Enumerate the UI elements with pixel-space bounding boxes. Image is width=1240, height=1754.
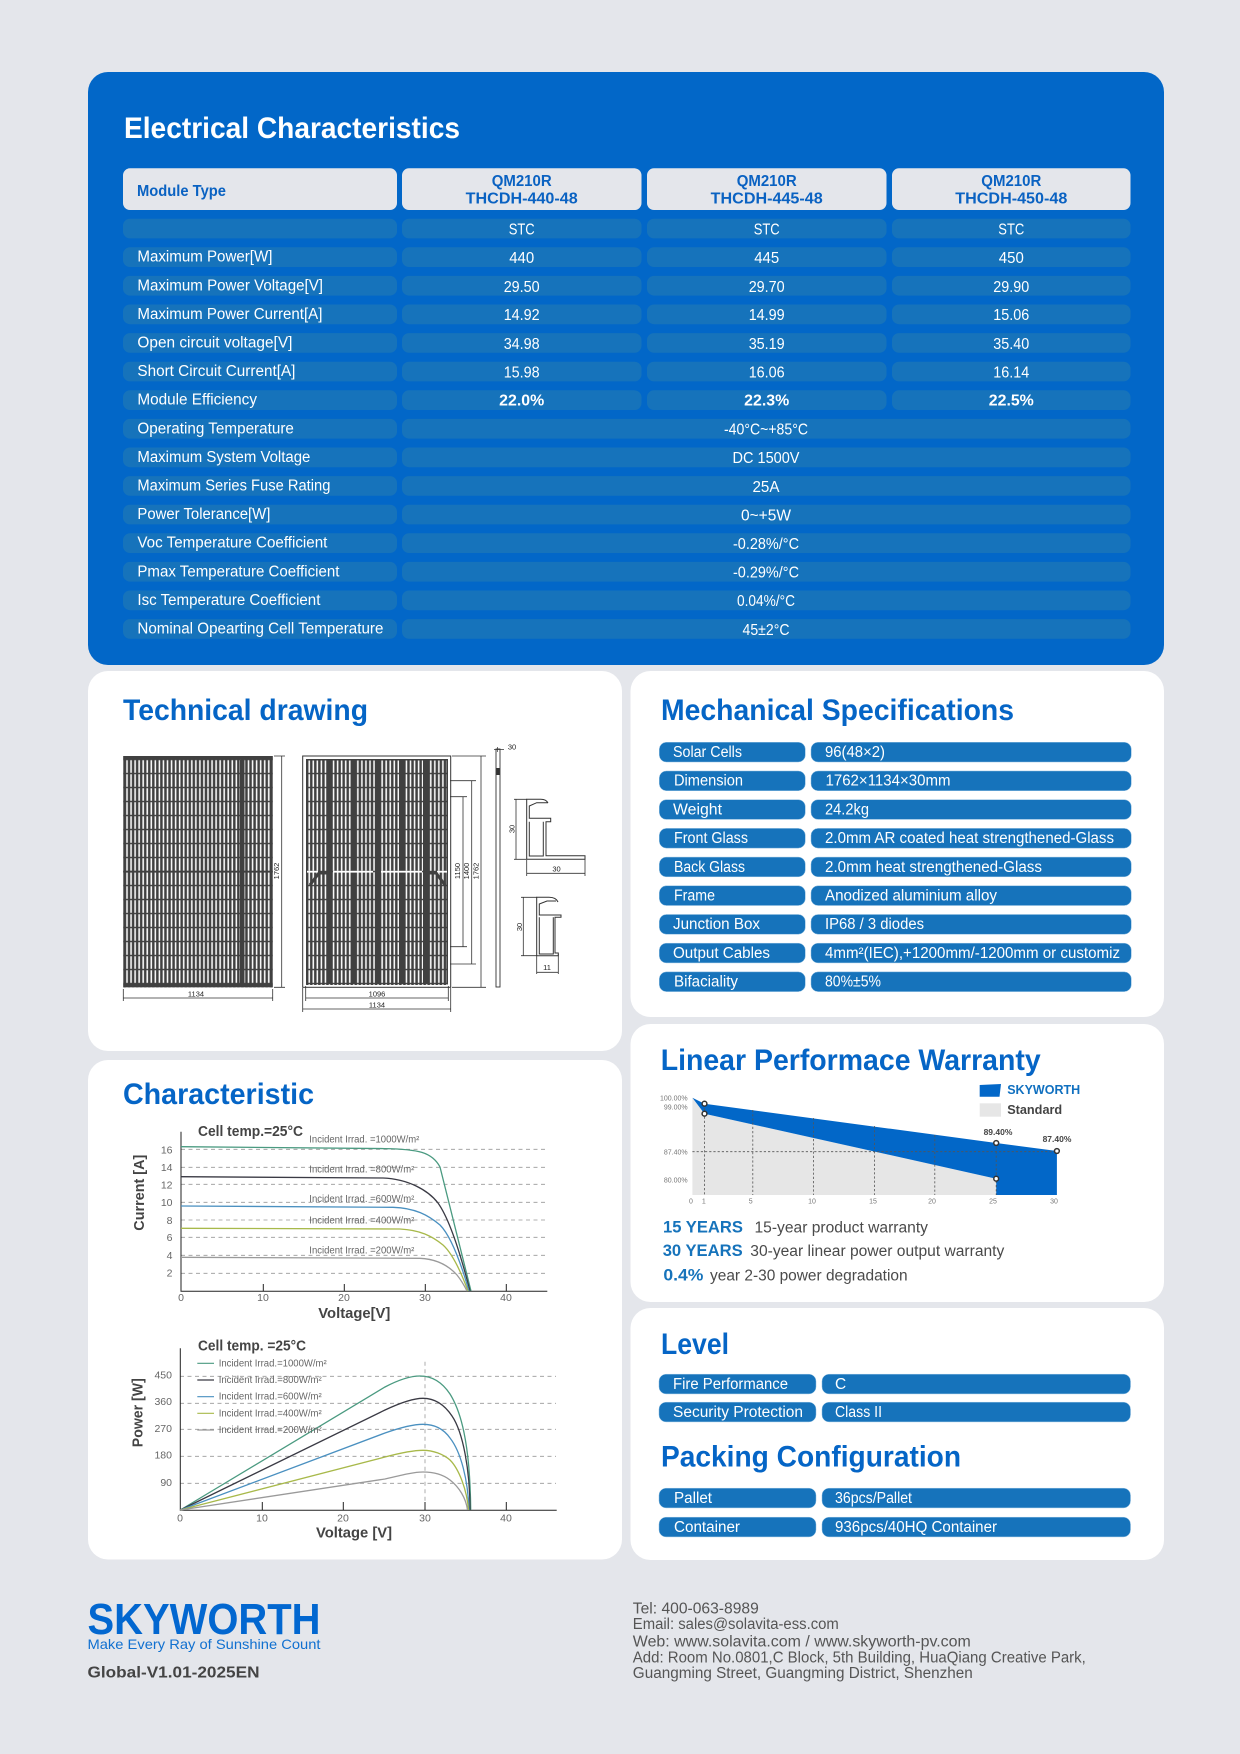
panel: technical drawing (88, 671, 622, 1051)
chart: current vs voltage: 40 (500, 1292, 512, 1304)
heading: packing configuration: Packing Configuration (661, 1440, 961, 1474)
table row labels: Maximum Power Current[A] (137, 306, 322, 323)
spec labels and values: Frame (674, 888, 715, 904)
chart: current vs voltage: 4 (167, 1250, 173, 1262)
chart: warranty curve: 15 (869, 1198, 877, 1205)
drawing: module rear view (303, 756, 486, 1012)
chart: power vs voltage: 90 (160, 1477, 172, 1489)
spec labels and values: 2.0mm AR coated heat strengthened-Glass (825, 830, 1114, 847)
table values: 450 (999, 250, 1024, 267)
chart: warranty curve: 1 (702, 1198, 706, 1205)
chart: warranty curve: 99.00% (664, 1104, 688, 1112)
table header row: Module Type (137, 183, 226, 200)
chart legend: skyworth and standard: SKYWORTH (1007, 1082, 1080, 1097)
chart: warranty curve: 87.40% (1043, 1134, 1072, 1144)
chart legend (197, 1358, 327, 1436)
table values: STC (998, 222, 1024, 238)
chart legend: skyworth and standard (980, 1082, 1080, 1117)
chart: power vs voltage (130, 1339, 557, 1542)
level rows: Class II (835, 1404, 882, 1421)
table values: 29.70 (749, 279, 785, 296)
table values: 29.50 (504, 279, 540, 296)
chart: current vs voltage (131, 1124, 547, 1322)
table values: STC (754, 222, 780, 238)
footer: contact details (633, 1600, 1086, 1682)
table values: 29.90 (993, 279, 1030, 296)
drawing: frame profile short side: 30 (515, 923, 524, 931)
panel: mechanical specifications (630, 671, 1164, 1017)
table values: 15.98 (504, 364, 540, 381)
drawing: frame profile long side: 30 (552, 864, 561, 874)
table header row: THCDH-445-48 (711, 190, 823, 207)
packing rows: Container (674, 1519, 740, 1536)
chart legend: Incident Irrad.=400W/m² (219, 1408, 322, 1419)
chart: current vs voltage: 10 (161, 1197, 173, 1209)
chart: power vs voltage: 30 (419, 1513, 431, 1525)
table header row: QM210R (981, 173, 1042, 190)
chart: warranty curve: 0 (689, 1198, 693, 1205)
panel: linear performance warranty (630, 1024, 1164, 1302)
packing rows: Pallet (674, 1490, 713, 1507)
chart: power vs voltage: 270 (154, 1423, 172, 1435)
spec labels and values: 80%±5% (825, 974, 881, 990)
spec labels and values: Solar Cells (673, 744, 742, 761)
chart: power vs voltage: 10 (256, 1513, 268, 1525)
table row labels: Nominal Opearting Cell Temperature (137, 620, 383, 638)
table row labels (137, 249, 383, 638)
table values: -0.28%/°C (733, 536, 799, 553)
footer: contact details: Guangming Street, Guangming District, Shenzhen (633, 1665, 973, 1682)
table values: 440 (509, 250, 535, 267)
table values: 22.0% (499, 392, 544, 410)
packing rows: 36pcs/Pallet (835, 1490, 913, 1507)
level rows (659, 1374, 1130, 1422)
warranty terms: 15 YEARS (663, 1218, 743, 1237)
table values: 0.04%/°C (737, 593, 795, 610)
table values: 0~+5W (741, 507, 791, 524)
table header row: QM210R (737, 173, 797, 190)
chart legend: Incident Irrad.=800W/m² (219, 1375, 322, 1386)
panel: characteristic (88, 1060, 622, 1560)
chart: power vs voltage: Power [W] (130, 1378, 147, 1447)
heading: technical drawing: Technical drawing (123, 694, 368, 727)
tagline: Make Every Ray of Sunshine Count (88, 1636, 321, 1652)
heading: characteristic: Characteristic (123, 1078, 314, 1111)
level rows: C (835, 1376, 846, 1393)
spec labels and values: 96(48×2) (825, 744, 885, 761)
table values: 22.5% (989, 392, 1034, 410)
table values: DC 1500V (732, 450, 800, 467)
table values: 22.3% (744, 392, 789, 410)
chart: warranty curve: 80.00% (664, 1178, 688, 1184)
spec labels and values: IP68 / 3 diodes (825, 916, 924, 933)
footer: logo and version (88, 1595, 321, 1681)
chart: power vs voltage: 180 (154, 1450, 172, 1462)
chart: warranty curve: 100.00% (660, 1096, 688, 1102)
level rows: Security Protection (673, 1404, 803, 1421)
spec labels and values: Front Glass (674, 830, 748, 847)
table values: 15.06 (993, 307, 1029, 324)
drawing: frame profile long side (508, 799, 585, 876)
drawing: module front view: 1134 (188, 990, 204, 998)
chart: current vs voltage: 0 (178, 1292, 184, 1304)
chart: current vs voltage: 8 (167, 1215, 173, 1227)
drawing: module front view: 1762 (272, 863, 281, 879)
spec labels and values: 2.0mm heat strengthened-Glass (825, 859, 1042, 876)
warranty terms: 0.4% (663, 1266, 703, 1285)
chart: power vs voltage: 40 (500, 1513, 512, 1525)
spec bars (659, 742, 1131, 992)
heading: electrical characteristics: Electrical Characteristics (124, 112, 460, 145)
table row labels: Short Circuit Current[A] (137, 363, 295, 380)
table values: -40°C~+85°C (724, 422, 808, 439)
table values: 16.06 (749, 364, 785, 381)
table row labels: Power Tolerance[W] (137, 506, 270, 523)
warranty terms (663, 1218, 1005, 1285)
drawing: frame profile short side: 11 (543, 963, 551, 972)
chart: current vs voltage: Current [A] (131, 1155, 148, 1231)
chart: power vs voltage: Voltage [V] (316, 1525, 392, 1542)
chart legend: Incident Irrad.=600W/m² (219, 1392, 322, 1403)
chart: current vs voltage: 10 (257, 1292, 269, 1304)
footer: contact details: Tel: 400-063-8989 (633, 1600, 759, 1617)
chart: warranty curve: 25 (989, 1198, 997, 1205)
heading: linear performance warranty: Linear Performace Warranty (661, 1044, 1041, 1077)
warranty terms: 30-year linear power output warranty (750, 1243, 1005, 1260)
chart: power vs voltage: 0 (177, 1513, 183, 1525)
drawing: module rear view: 1400 (462, 863, 471, 879)
level rows: Fire Performance (673, 1376, 788, 1393)
chart: warranty curve: 10 (808, 1198, 816, 1205)
table values: 35.40 (993, 336, 1030, 353)
warranty terms: 15-year product warranty (754, 1220, 928, 1237)
warranty terms: 30 YEARS (663, 1241, 743, 1260)
table row labels: Maximum Power[W] (137, 249, 272, 266)
spec labels and values: Dimension (674, 773, 743, 790)
spec labels and values: Weight (673, 801, 723, 818)
drawing: module rear view: 1096 (369, 990, 385, 998)
chart: current vs voltage: Incident Irrad. =200W/m² (309, 1246, 415, 1257)
footer: contact details: Email: sales@solavita-ess.com (633, 1616, 839, 1633)
document version: Global-V1.01-2025EN (88, 1664, 260, 1681)
table row labels: Maximum Power Voltage[V] (137, 277, 323, 294)
chart: power vs voltage: 20 (337, 1513, 349, 1525)
chart legend: skyworth and standard: Standard (1007, 1102, 1062, 1117)
spec labels and values: Anodized aluminium alloy (825, 888, 997, 904)
table header row: QM210R (492, 173, 552, 190)
chart: current vs voltage: 6 (167, 1232, 173, 1244)
table values: 14.92 (504, 307, 540, 324)
spec labels and values: Junction Box (673, 916, 760, 933)
table values: 34.98 (504, 336, 540, 353)
drawing: module rear view: 1762 (472, 863, 480, 879)
table header row: THCDH-440-48 (466, 190, 578, 207)
spec labels and values (673, 744, 1120, 990)
chart: current vs voltage: 2 (167, 1268, 173, 1280)
chart: current vs voltage: 14 (161, 1162, 173, 1174)
drawing: module front view (123, 756, 285, 1001)
heading: mechanical specifications: Mechanical Specifications (661, 694, 1014, 727)
chart legend: Incident Irrad.=200W/m² (219, 1425, 322, 1436)
drawing: frame profile long side: 30 (508, 825, 516, 833)
chart: power vs voltage: Cell temp. =25°C (198, 1339, 306, 1355)
chart: warranty curve: 20 (928, 1198, 936, 1205)
spec labels and values: Output Cables (673, 945, 770, 962)
chart: warranty curve: 5 (749, 1198, 753, 1205)
table values (499, 222, 1034, 639)
table values: 16.14 (993, 364, 1030, 381)
table values: -0.29%/°C (733, 565, 799, 582)
chart: current vs voltage: 30 (419, 1292, 431, 1304)
chart: power vs voltage: 360 (154, 1396, 172, 1408)
chart: current vs voltage: Incident Irrad. =400W/m² (309, 1215, 415, 1226)
chart: current vs voltage: Incident Irrad. =600W/m² (309, 1194, 415, 1205)
panel: level and packing configuration (630, 1308, 1164, 1560)
chart: warranty curve: 89.40% (984, 1127, 1013, 1137)
table row labels: Module Efficiency (137, 392, 257, 409)
spec labels and values: Back Glass (674, 859, 745, 876)
table row labels: Pmax Temperature Coefficient (137, 563, 340, 580)
chart: power vs voltage: 450 (154, 1370, 172, 1382)
chart: warranty curve: 87.40% (664, 1150, 688, 1156)
table values: STC (509, 222, 535, 238)
drawing: module rear view: 1134 (369, 1000, 385, 1010)
table row labels: Open circuit voltage[V] (137, 334, 292, 352)
table row labels: Operating Temperature (137, 420, 294, 437)
logo wordmark: SKYWORTH (88, 1595, 320, 1644)
packing rows (659, 1488, 1130, 1537)
chart: current vs voltage: Incident Irrad. =800W/m² (309, 1165, 415, 1176)
spec labels and values: 1762×1134×30mm (826, 773, 950, 790)
table values: 445 (754, 250, 779, 267)
table values: 35.19 (749, 336, 785, 353)
chart: current vs voltage: Voltage[V] (318, 1305, 390, 1322)
table row labels: Maximum System Voltage (137, 449, 310, 466)
panel: electrical characteristics (88, 72, 1164, 665)
chart legend: Incident Irrad.=1000W/m² (219, 1358, 327, 1370)
table row labels: Maximum Series Fuse Rating (137, 478, 330, 494)
table header row: THCDH-450-48 (955, 190, 1067, 207)
spec labels and values: 4mm²(IEC),+1200mm/-1200mm or customiz (825, 945, 1120, 962)
chart: current vs voltage: Incident Irrad. =1000W/m² (309, 1135, 420, 1146)
drawing: module side view: 30 (508, 742, 516, 752)
table values: 14.99 (749, 307, 785, 324)
chart: current vs voltage: 12 (161, 1179, 173, 1191)
table row backgrounds (123, 219, 1130, 639)
packing rows: 936pcs/40HQ Container (835, 1519, 997, 1536)
footer: contact details: Add: Room No.0801,C Block, 5th Building, HuaQiang Creative Park, (633, 1650, 1086, 1667)
chart: warranty curve (660, 1096, 1072, 1205)
warranty terms: year 2-30 power degradation (710, 1268, 908, 1285)
chart: current vs voltage: 20 (338, 1292, 350, 1304)
drawing: frame profile short side (515, 897, 561, 974)
chart: current vs voltage: 16 (161, 1144, 173, 1156)
chart: current vs voltage: Cell temp.=25°C (198, 1124, 303, 1140)
heading: level: Level (661, 1328, 729, 1361)
footer: contact details: Web: www.solavita.com / www.skyworth-pv.com (633, 1634, 971, 1651)
spec labels and values: 24.2kg (825, 801, 869, 818)
spec labels and values: Bifaciality (674, 974, 738, 990)
table values: 25A (752, 479, 780, 496)
drawing: module rear view: 1150 (453, 863, 462, 879)
drawing: module side view (494, 742, 516, 987)
table row labels: Voc Temperature Coefficient (137, 535, 328, 552)
table row labels: Isc Temperature Coefficient (137, 592, 321, 609)
table values: 45±2°C (742, 622, 790, 639)
table header row (123, 168, 1130, 210)
chart: warranty curve: 30 (1050, 1198, 1058, 1205)
